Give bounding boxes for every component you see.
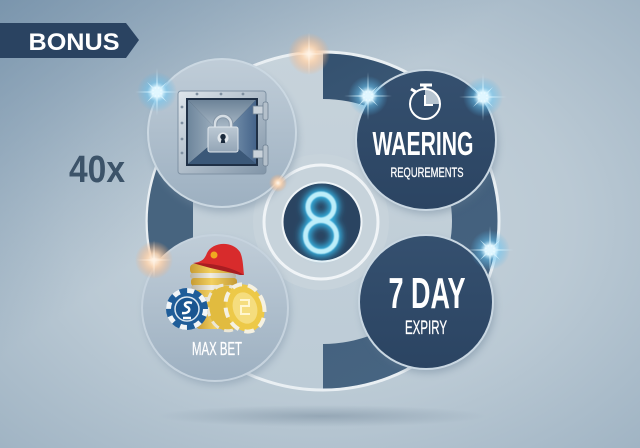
- floor shadow: [157, 405, 487, 427]
- text: EXPIRY: EXPIRY: [405, 318, 447, 339]
- icon: safe with padlock: [178, 91, 268, 174]
- panel: vault: [148, 59, 298, 212]
- text: WAERING: WAERING: [372, 125, 474, 162]
- text: REQUREMENTS: REQUREMENTS: [390, 164, 464, 180]
- panel: expiry: [359, 235, 495, 373]
- light flares: [135, 32, 514, 279]
- text: 7 DAY: 7 DAY: [388, 269, 466, 318]
- coin stack: [190, 264, 238, 329]
- icon: coin stack with cap and chips: [166, 244, 270, 337]
- banner: bonus: [0, 23, 139, 58]
- label: 40x: 40x: [69, 149, 125, 191]
- blue chip: [166, 288, 208, 330]
- glowing number 8: [306, 194, 336, 252]
- dark band: top right: [323, 54, 498, 221]
- banner: bonus: BONUS: [28, 29, 120, 56]
- dark band: left: [148, 168, 193, 258]
- dark band: bottom right: [323, 221, 498, 388]
- center badge: [253, 154, 389, 290]
- text: MAX BET: MAX BET: [192, 339, 242, 359]
- icon: stopwatch: [410, 85, 440, 119]
- panel: wagering requirements: [356, 70, 498, 214]
- cap: [193, 244, 244, 275]
- panel: max bet: [142, 235, 290, 385]
- gold chips: [204, 279, 270, 337]
- ring diagram base: [147, 52, 499, 390]
